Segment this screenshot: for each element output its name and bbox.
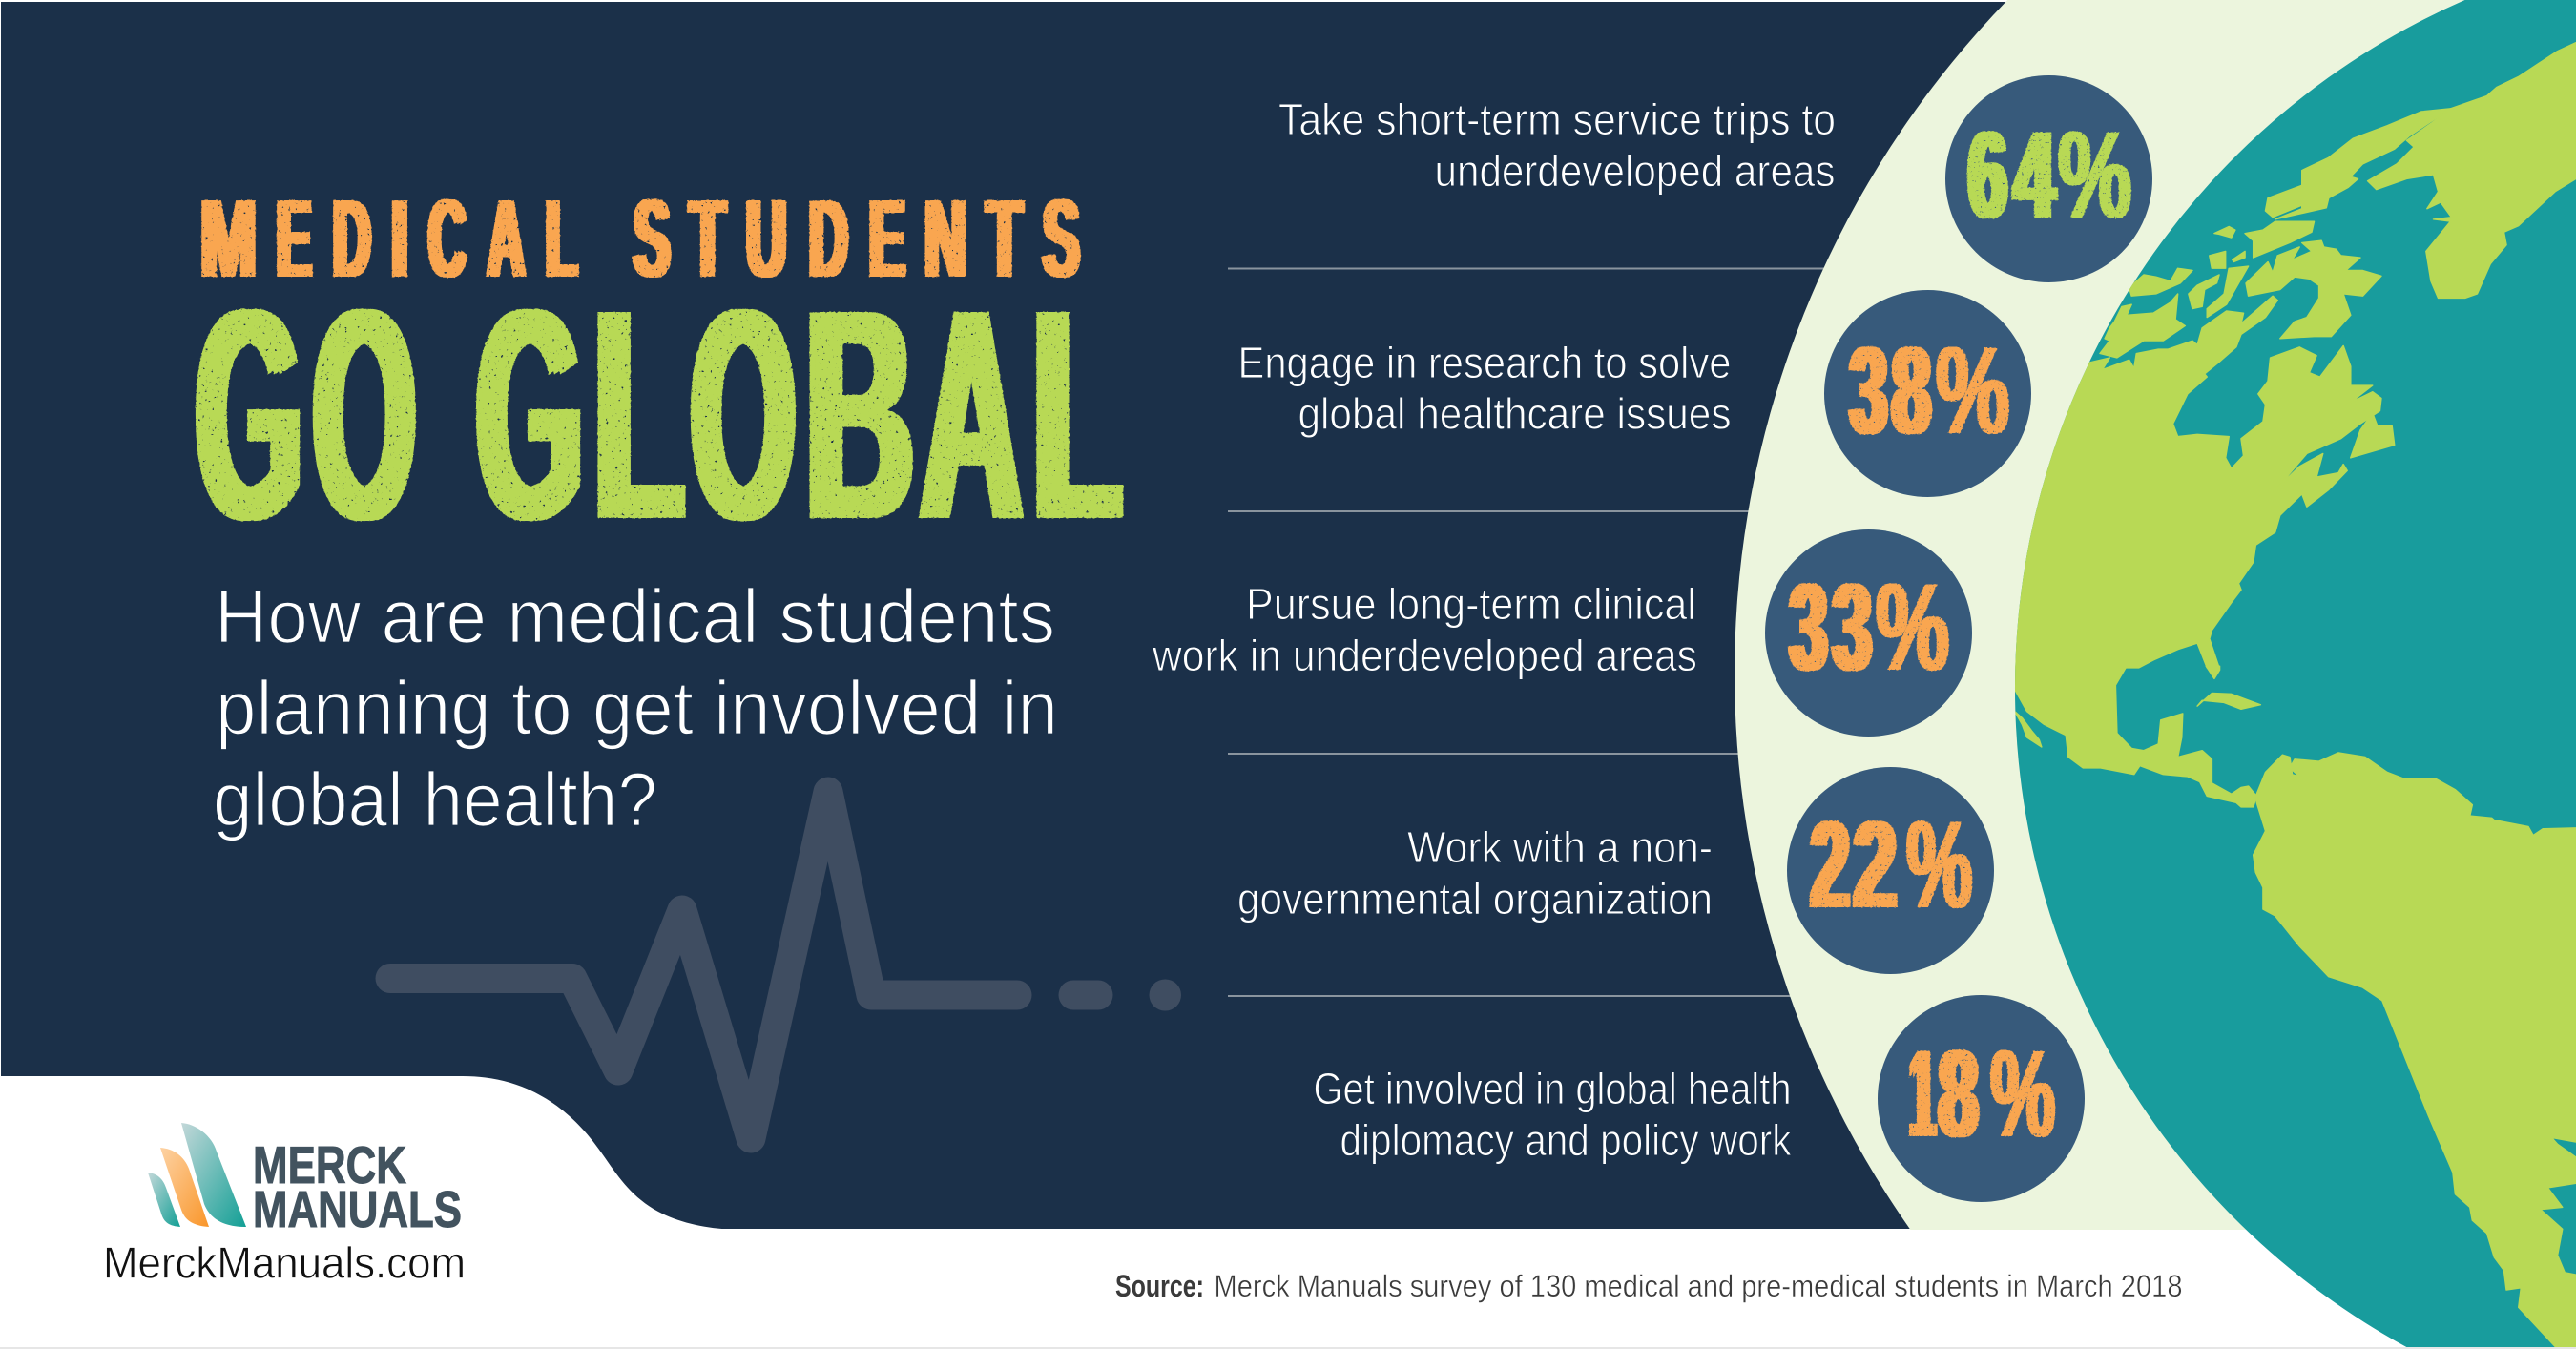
globe with continents [1959,0,2576,1349]
stat circle: 64% [1944,74,2152,282]
list item: research: global healthcare issues [1298,389,1731,439]
stat circle: 38%: % [1936,321,2009,460]
source note: Merck Manuals survey of 130 medical and pre-medical students in March 2018 [1214,1269,2183,1303]
title line: go global: G [475,247,583,582]
title line: medical students: T [690,176,726,301]
stat circle: 64%: % [2058,105,2131,244]
list item: diplomacy and policy [1313,1064,1792,1165]
list item: research: Engage in research to solve [1238,338,1731,387]
title line: medical students: A [487,176,525,301]
stat circle: 18%: 8 [1939,1024,1978,1163]
title line: go global: O [691,247,796,582]
north america and arctic islands [1959,43,2576,668]
title line: medical students: U [746,176,787,301]
title line: medical students: E [869,176,904,301]
title line: go global: L [1032,247,1122,582]
logo icon [148,1123,246,1227]
title line: medical students: D [809,176,847,301]
list item: short-term service trips [1278,94,1836,196]
stat circle: 22% [1786,767,1994,973]
list item: diplomacy and policy: diplomacy and policy work [1340,1115,1792,1165]
logo wordmark: MANUALS [253,1181,462,1238]
stat circle: 38% [1824,290,2030,496]
stat circle: 64%: 6 [1968,105,2007,244]
title line: medical students: C [428,176,466,301]
list item: non-governmental organization [1237,822,1713,924]
title line: medical students: L [546,176,577,301]
list item: short-term service trips: underdeveloped areas [1435,146,1836,196]
list item: long-term clinical work: work in underdeveloped areas [1152,631,1697,680]
logo wordmark [253,1135,462,1238]
list item: non-governmental organization: governmental organization [1237,874,1713,924]
divider lines [1228,269,1908,996]
title line: medical students: S [1043,176,1080,301]
list item: long-term clinical work: Pursue long-term clinical [1246,579,1696,629]
list item: diplomacy and policy: Get involved in global health [1313,1064,1792,1113]
title line: go global: O [313,247,416,582]
stat circle: 18%: % [1990,1024,2055,1163]
stat circle: 33%: 3 [1790,557,1827,696]
title line: go global: G [195,247,302,582]
list item: research [1238,338,1731,439]
list item: non-governmental organization: Work with a non- [1407,822,1713,872]
stat circle: 33% [1765,529,1971,737]
pale halo around globe [1735,0,2576,1230]
stat circle: 22%: 2 [1811,795,1849,934]
title line: medical students: E [277,176,311,301]
title line: go global: A [921,247,1022,582]
white footer panel with curved edge [0,1076,2576,1347]
question text [213,574,1058,841]
stat circle: 38%: 8 [1892,321,1930,460]
title line: go global [195,247,1124,582]
title line: go global: B [805,247,914,582]
stat circle: 33%: % [1876,557,1949,696]
title line: medical students: I [391,176,408,301]
logo wordmark: MERCK [253,1135,406,1194]
stat circle: 33%: 3 [1833,557,1871,696]
title line: medical students [200,176,1082,301]
bottom hairline [0,1347,2576,1349]
title line: medical students: S [634,176,671,301]
source note: Source: [1115,1269,1204,1303]
stat circle: 64%: 4 [2013,105,2054,244]
title line: go global: L [593,247,684,582]
title line: medical students: M [200,176,256,301]
central and south america [1959,666,2576,1349]
question text: global health? [213,758,657,841]
title line: medical students: N [924,176,966,301]
question text: planning to get involved in [216,666,1058,751]
list item: long-term clinical work [1152,579,1697,680]
title line: medical students: T [987,176,1023,301]
title line: medical students: D [333,176,370,301]
stat circle: 18%: 1 [1910,1024,1935,1163]
stat circle: 22%: % [1906,795,1972,934]
logo: merck manuals [148,1123,462,1238]
heartbeat line [390,792,1166,1138]
list item: short-term service trips: Take short-term service trips to [1278,94,1836,144]
website url: MerckManuals.com [103,1238,466,1288]
stat circle: 38%: 3 [1850,321,1887,460]
stat circle: 18% [1878,994,2084,1202]
question text: How are medical students [215,574,1055,659]
stat circle: 22%: 2 [1854,795,1897,934]
